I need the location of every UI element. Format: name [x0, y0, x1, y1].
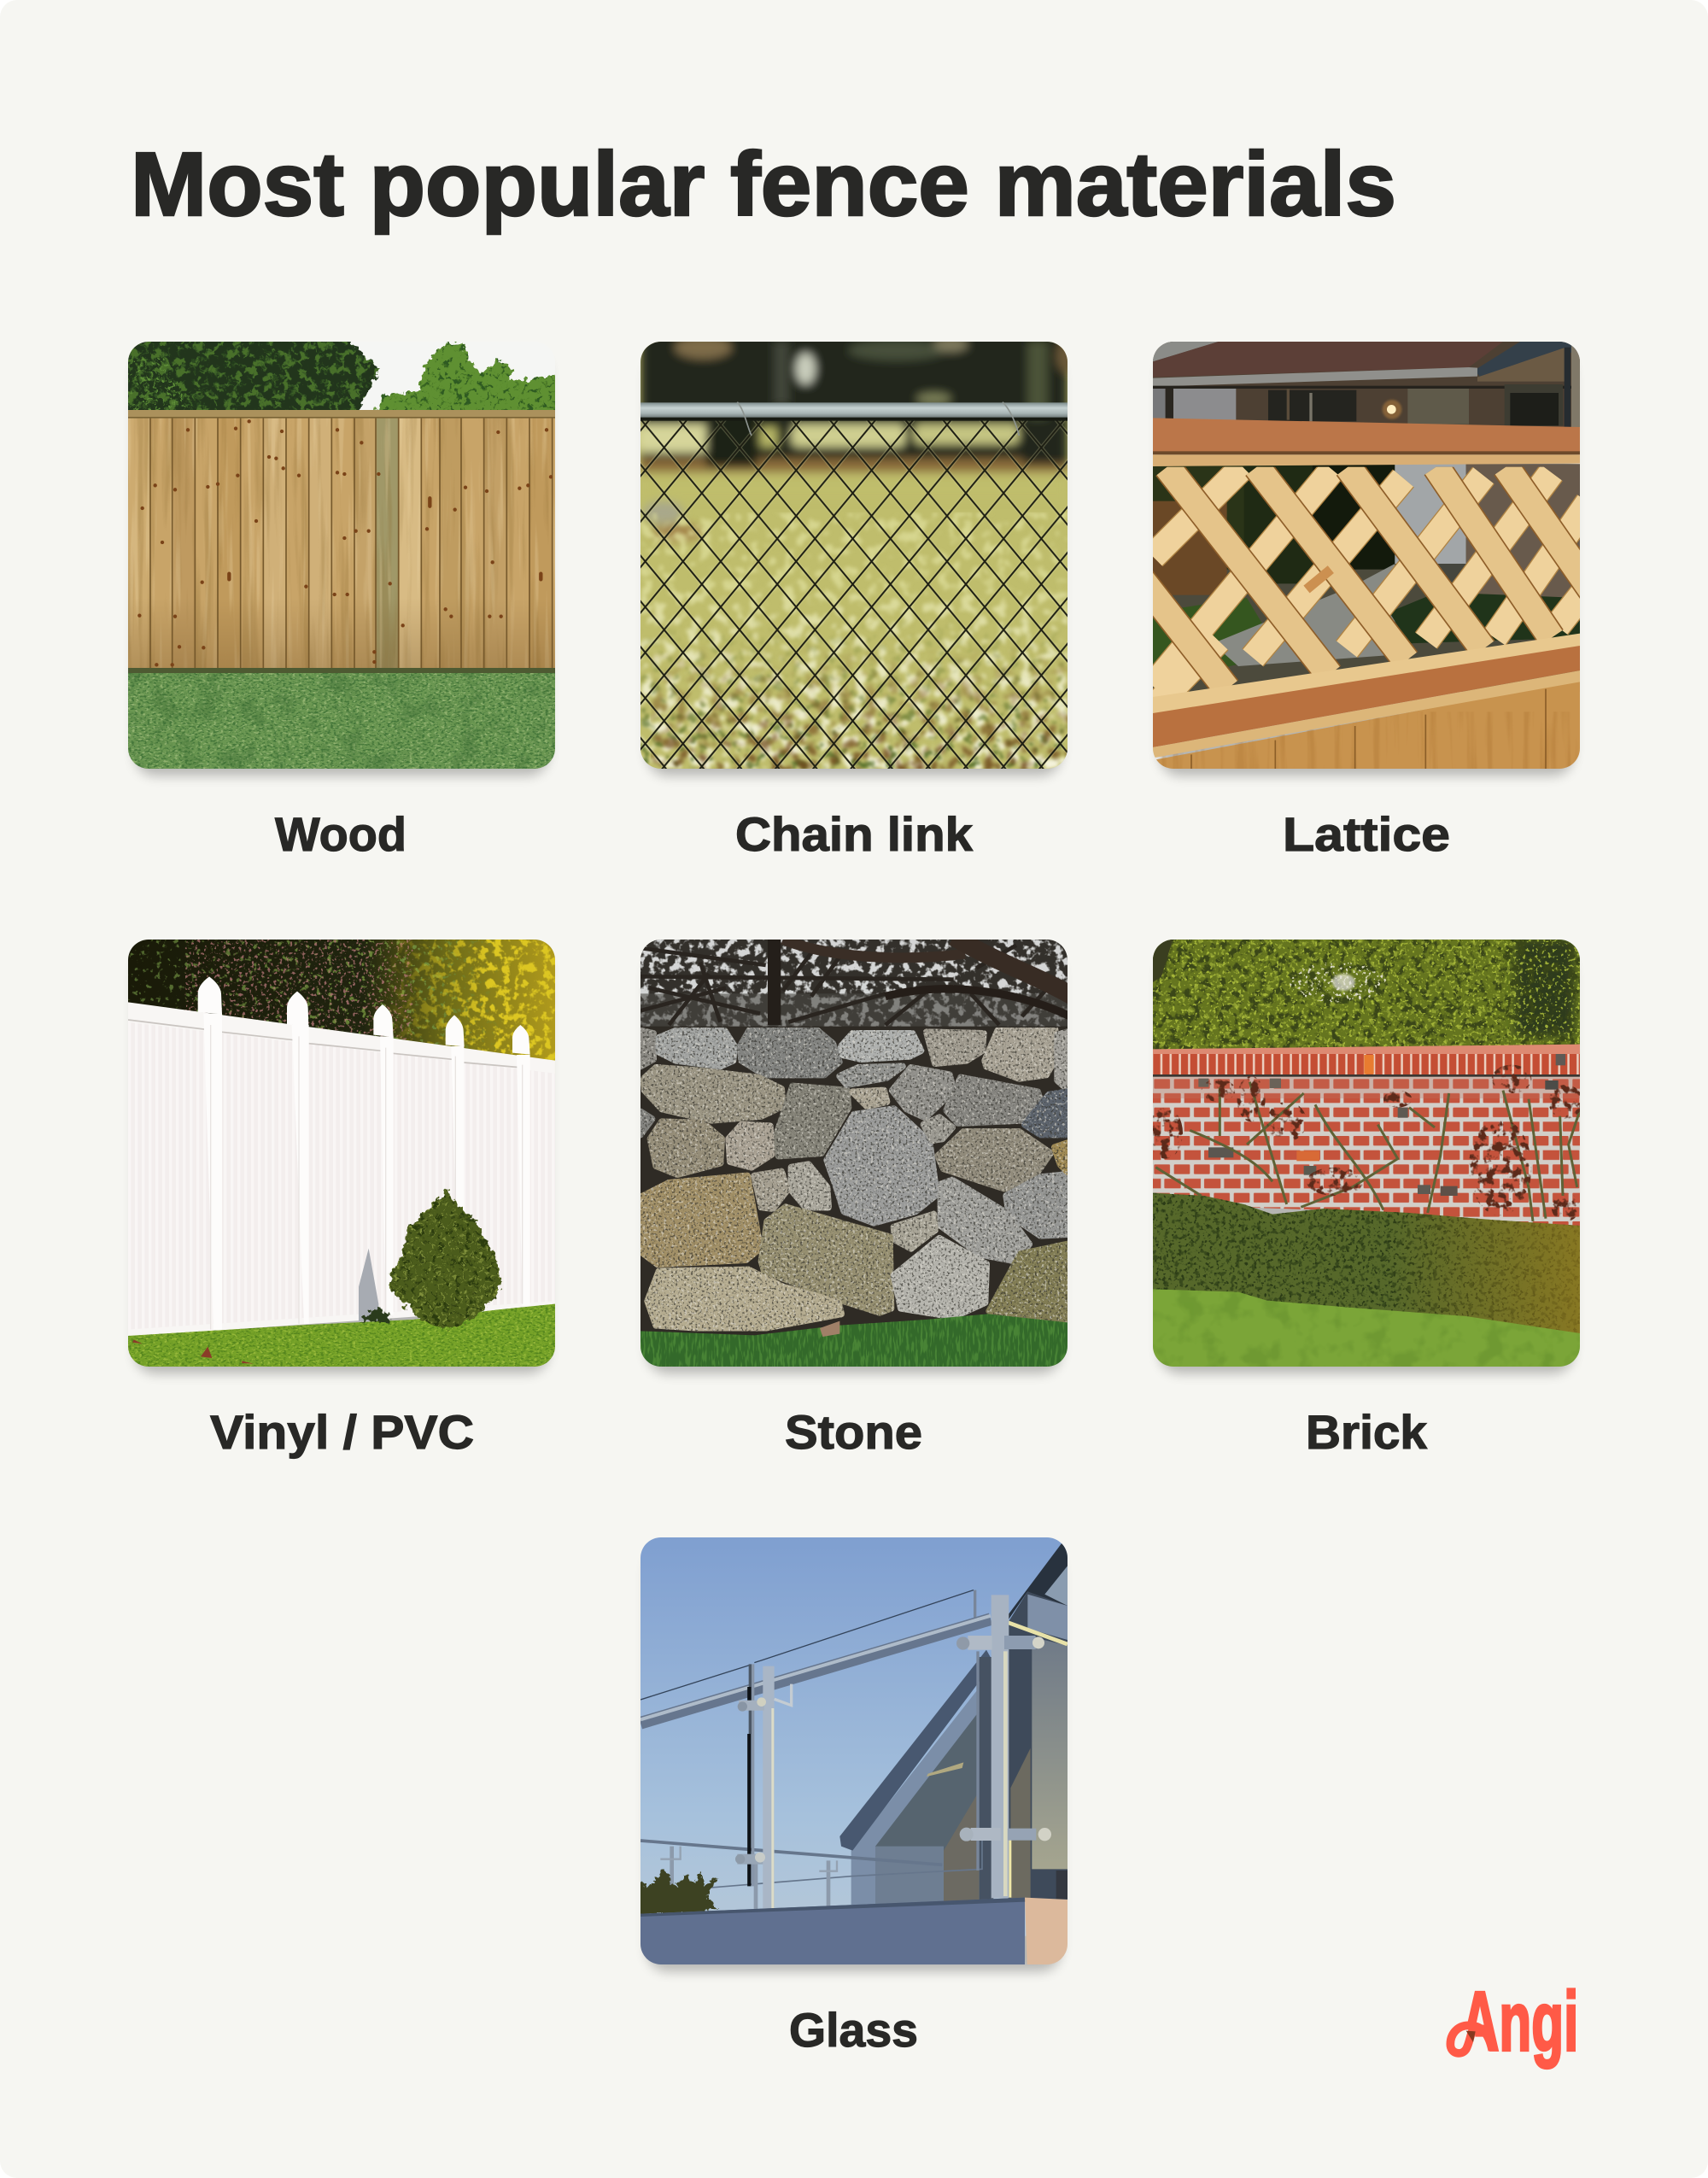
fence	[128, 976, 555, 1337]
lawn	[128, 668, 555, 769]
branches	[640, 937, 1073, 1033]
photo: chain link fence	[638, 331, 1079, 784]
label: Brick: Brick	[1306, 1405, 1428, 1459]
lattice slats	[1153, 466, 1580, 697]
foliage	[128, 940, 555, 1087]
grass	[640, 1314, 1068, 1367]
photo: glass railing	[632, 1537, 1068, 1964]
top rail	[1153, 418, 1580, 466]
label: Wood: Wood	[275, 807, 407, 861]
field speckle	[640, 512, 1078, 784]
handrail and glass	[640, 1590, 991, 1886]
fence boards	[128, 410, 555, 673]
house	[1153, 342, 1580, 427]
distant railing	[640, 1828, 982, 1911]
building	[839, 1543, 1068, 1907]
mortar	[640, 1027, 1068, 1339]
panel: brick	[1149, 940, 1582, 1459]
top rail	[640, 402, 1068, 436]
foliage	[1153, 940, 1580, 1053]
hedge	[1153, 1193, 1580, 1334]
stones	[640, 1028, 1068, 1331]
panel: lattice	[1136, 342, 1597, 861]
lawn	[1153, 1289, 1580, 1367]
panel: chain link	[638, 331, 1079, 861]
label: Chain link: Chain link	[735, 807, 974, 861]
label: Glass: Glass	[789, 2003, 918, 2057]
mesh wire	[640, 420, 1068, 769]
deck wall	[640, 1898, 1068, 1964]
bottom rails and boards	[1153, 634, 1580, 769]
label: Vinyl / PVC: Vinyl / PVC	[210, 1405, 474, 1459]
climbing vines	[1149, 1065, 1582, 1221]
plant	[632, 1869, 719, 1915]
grass	[128, 1304, 555, 1367]
panel: vinyl	[128, 940, 555, 1459]
trees	[128, 342, 555, 410]
posts and clamps	[735, 1595, 1051, 1910]
photo: wood fence	[120, 333, 564, 769]
wall	[1153, 1074, 1580, 1227]
panel: stone	[640, 937, 1073, 1459]
view through lattice	[1153, 464, 1580, 692]
coping	[1153, 1045, 1580, 1077]
blurred background	[638, 331, 1079, 541]
shrub	[361, 1189, 501, 1330]
logo: Angi	[1450, 1975, 1578, 2069]
photo: stone wall	[640, 937, 1073, 1367]
label: Stone: Stone	[785, 1405, 922, 1459]
label: Lattice: Lattice	[1283, 807, 1450, 861]
photo: brick wall	[1149, 940, 1582, 1367]
photo: lattice fence	[1136, 342, 1597, 769]
logo: Angi: Angi	[1461, 1975, 1578, 2069]
photo: vinyl fence	[128, 940, 555, 1367]
title: Most popular fence materials	[131, 134, 1396, 235]
panel: glass	[632, 1537, 1068, 2057]
panel: wood	[120, 333, 564, 861]
